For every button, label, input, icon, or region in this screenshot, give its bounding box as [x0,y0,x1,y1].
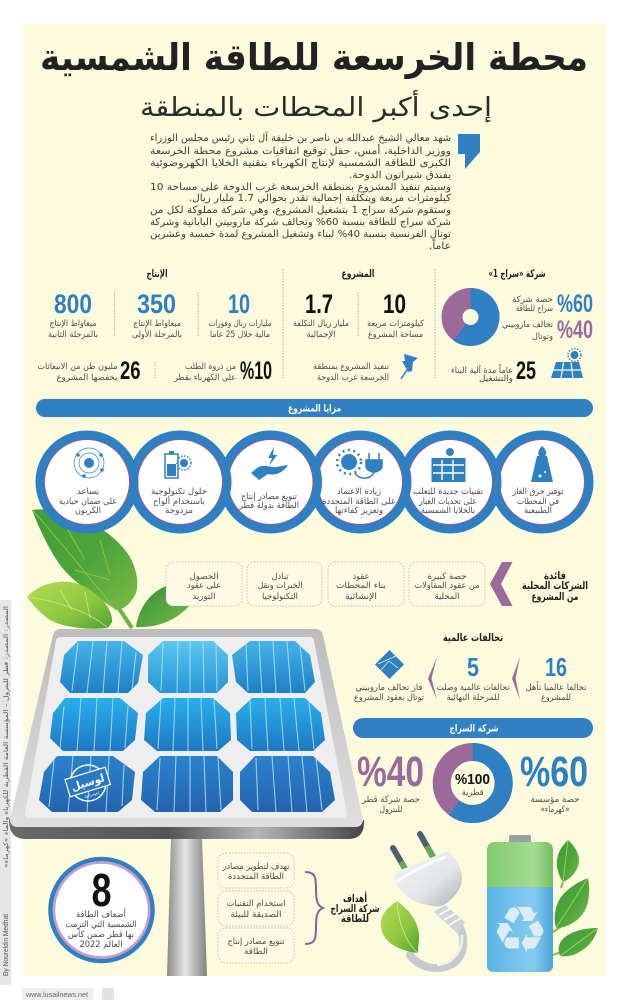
label: يساعد [77,487,100,497]
label: 40% [361,795,420,815]
stamp: Lusail: لوسيل [70,771,106,794]
box: know-how transfer [247,562,322,606]
icon: envelope [375,650,404,679]
icon: quote mark [458,134,480,169]
label: على ضمان حيادية [59,497,117,507]
circle: renewables [313,435,407,529]
box: contracting share: المحلية [434,592,460,602]
label: 25: عاماً مدة آلية البناء [451,363,513,376]
stat: 5: 5 [467,652,479,682]
label: winner: فاز تحالف ماروبيني [356,683,422,693]
pie chart [442,288,500,346]
label: زيادة الاعتماد [337,487,381,497]
label: savings: مليارات ريال وفورات [208,319,272,329]
heading: فائدة [544,570,566,582]
source strip [0,600,11,985]
label: winner [354,683,425,703]
label: توفير حرق الغاز [512,487,564,497]
intro text: وسيتم تنفيذ المشروع بمنطقة الخرسعة غرب الدوحة على مساحة 10 [150,182,451,193]
label: 60% [530,795,580,815]
icon: battery and sun [165,451,191,478]
label: 60%: حصة شركة [512,295,553,305]
label: 5: تحالفات عالمية وصلت [436,683,510,693]
stat: 10: 10 [383,289,406,319]
label: باستخدام ألواح [153,495,205,507]
callout: world cup commitment: بها قطر ضمن كأس [68,928,134,940]
donut chart [442,752,504,814]
icon: push pin [401,354,418,379]
icon: separator chevron [428,657,437,700]
icon: solar panel [551,348,583,378]
icon: solar grid [432,448,466,482]
intro text: بفندق شيراتون الدوحة. [349,170,451,181]
box: construction contracts: الإنشائية [345,592,377,602]
source text: المصدر: المصدر: قطر للبترول – المؤسسة العامة القطرية للكهرباء والماء «كهرماء» [2,606,10,868]
label [238,492,299,511]
box: develop renewables: تهدف لتطوير مصادر [222,862,290,872]
intro text: ووزير الداخلية، أمس، حفل توقيع اتفاقيات مشروع محطة الخرسعة [150,144,451,157]
label: الطاقة بدولة قطر [238,501,299,511]
panel: production [38,268,272,385]
intro text: توتال الفرنسية بنسبة 40% لبناء وتشغيل المشروع لمدة خمسة وعشرين [150,229,451,240]
callout: world cup commitment [50,859,152,961]
label: الطبيعية [524,506,552,516]
label: 40%: وتوتال [532,332,553,342]
label: peak demand: على الكهرباء بقطر [173,373,236,383]
stat: 800: 800 [54,289,92,319]
label: 16: للمشروع [541,693,571,703]
box: eco technologies: استخدام التقنيات [226,899,286,909]
callout: world cup commitment: العالم 2022 [80,940,122,950]
box: supply contracts: الحصول [190,572,218,582]
label: second phase [48,319,98,340]
label: emissions: يخفضها المشروع [56,373,118,383]
label: تنويع مصادر إنتاج [241,492,298,502]
label: 16 [526,681,587,703]
label: location: الخرسعة غرب الدوحة [317,373,389,383]
donut chart: قطرية [462,788,484,798]
icon: separator chevron [512,657,520,700]
label: peak demand [173,362,236,383]
icon: flask [531,446,553,482]
intro text: وستقوم شركة سراج 1 بتشغيل المشروع، وهي شركة مملوكة لكل من [150,205,451,216]
leaves [553,840,598,956]
label: 5 [436,683,510,703]
label: cost [293,319,349,340]
label: cost: مليار ريال التكلفة [293,319,349,329]
label [413,487,484,516]
label: 25 [451,363,513,384]
box: develop renewables: الطاقة المتجددة [228,872,284,882]
label: على تحديات الغبار [418,497,477,507]
label: savings [208,319,272,340]
icon: chevron [490,562,512,606]
label: 25: والتشغيل [479,374,513,384]
cells [39,641,335,812]
heading: أهداف [343,891,367,905]
box: supply contracts: التوريد [192,592,216,602]
subtitle: إحدى أكبر المحطات بالمنطقة [140,89,492,123]
callout: world cup commitment: أضعاف الطاقة [76,908,126,920]
label: مزدوجة [165,506,193,516]
stat: 60%: %60 [557,290,593,318]
intro text [150,131,451,252]
stat: 10%: %10 [240,357,272,385]
heading [330,891,380,925]
banner: Siraj company: شركة السراج [450,724,499,734]
box: contracting share: من عقود المقاولات [414,581,480,591]
box: develop renewables [218,853,294,888]
panel: Siraj goals [218,853,380,963]
heading [522,570,588,603]
intro text: الكبرى للطاقة الشمسية لإنتاج الكهرباء بتقنية الخلايا الكهروضوئية [150,158,451,169]
stat: 350: 350 [137,289,176,319]
label: emissions [38,362,118,383]
label: في المحطات [517,497,559,507]
heading: من المشروع [532,591,578,603]
heading: للطاقة [341,913,369,925]
label: area [367,319,425,340]
label: emissions: مليون طن من الانبعاثات [38,362,118,372]
label: second phase: بالمرحلة الثانية [48,330,98,340]
label: حلول تكنولوجية [151,487,207,497]
box: contracting share: حصة كبيرة [428,572,466,582]
banner: project advantages [36,399,593,417]
label [59,487,117,516]
stat: 40%: %40 [357,748,424,796]
label: peak demand: من ذروة الطلب [185,362,236,372]
label [151,487,207,516]
circle: dual technology [133,435,227,529]
panel: advantages circles [40,435,589,529]
illustration: battery with leaves [487,835,598,972]
label: location: تنفيذ المشروع بمنطقة [313,362,390,372]
box: diversify sources [218,928,294,963]
stamp: Lusail: إنفوجرافيك [83,790,100,800]
label: 60%: حصة مؤسسة [530,795,580,805]
label: 40% [502,320,554,342]
stat: 10: 10 [228,289,250,319]
label: 60%: «كهرماء» [540,805,570,815]
label: وتعزيز كفاءتها [335,506,383,516]
stat: 1.7: 1.7 [305,289,333,319]
stat: 26: 26 [120,357,140,385]
heading: الشركات المحلية [522,580,588,592]
panel: project [293,268,425,383]
dividers [114,269,435,378]
intro text: عاماً. [429,238,451,252]
label: first phase: بالمرحلة الأولى [132,328,182,340]
panel: Siraj ownership [357,748,588,815]
box: diversify sources: تنويع مصادر إنتاج [228,937,285,947]
circle: carbon neutrality [40,435,134,529]
label: الكربون [75,506,101,516]
label: 16: تحالفا عالميا تأهل [526,681,587,693]
label: تقنيات جديدة للتغلب [413,487,484,497]
credit text: By Noureldin Medhat [1,913,10,976]
circle: gas flaring [495,435,589,529]
label: first phase [132,319,182,340]
icon: large green leaves [27,509,190,629]
heading: شركة «سراج 1» [488,268,546,280]
illustration: plug with leaf [381,834,465,968]
box: eco technologies [218,891,294,926]
stamp: Lusail [63,760,113,806]
box: diversify sources: الطاقة [244,947,268,957]
footer: website [22,988,114,1000]
circle: diversify sources [224,435,318,529]
title: محطة الخرسعة للطاقة الشمسية [40,36,588,79]
box: construction contracts [328,562,404,606]
heading: شركة السراج [330,903,380,915]
box: eco technologies: الصديقة للبيئة [230,910,282,920]
icon: recycle: ♻ [491,894,549,968]
label: second phase: ميغاواط الإنتاج [50,319,96,329]
stat: 40%: %40 [557,316,593,344]
box: know-how transfer: تبادل [272,572,289,582]
illustration: solar panel [9,636,364,839]
icon: hand and bolt [251,447,288,480]
label [512,487,564,516]
box: construction contracts: عقود [352,572,370,582]
label: cost: الإجمالية [306,330,336,340]
icon: panel pole [167,838,207,976]
stat: 16: 16 [545,652,567,682]
label: location [313,362,390,383]
box: contracting share [409,562,485,606]
panel: global alliances [354,632,587,703]
box: construction contracts: بناء المحطات [336,581,386,591]
label: 60% [512,295,553,314]
label: 40%: تحالف ماروبيني [502,320,554,330]
icon: sun and plug [337,450,382,478]
box: know-how transfer: الخبرات ونقل [258,581,302,591]
box: supply contracts [166,562,242,606]
label: area: كيلومترات مربعة [367,319,425,329]
box: supply contracts: على عقود [187,581,221,591]
banner: project advantages: مزايا المشروع [288,404,341,414]
label: بالخلايا الشمسية [421,506,475,516]
intro text: شهد معالي الشيخ عبدالله بن ناصر بن خليفة آل ثاني رئيس مجلس الوزراء [150,131,451,144]
label: winner: توتال بعقود المشروع [354,693,425,703]
heading: المشروع [342,268,374,280]
panel: Siraj 1 company [442,268,593,385]
heading: الإنتاج [146,268,168,280]
icon: brace [305,872,323,944]
stat: 25: 25 [516,357,536,385]
box: know-how transfer: التكنولوجيا [262,592,298,602]
heading: تحالفات عالمية [443,632,503,644]
banner: Siraj company [353,718,593,738]
label: 60%: سراج للطاقة [516,304,553,314]
stat: 60%: %60 [520,748,588,796]
label: savings: مالية خلال 25 عاما [210,330,270,340]
label [322,487,396,516]
panel: local companies benefit [166,562,588,606]
label: first phase: ميغاواط الإنتاج [133,319,181,329]
intro text: كيلومترات مربعة وبتكلفة إجمالية تقدر بحوالي 1.7 مليار ريال. [189,193,451,204]
callout: world cup commitment: الشمسية التي التزمت [66,920,136,930]
label: 40%: للبترول [380,805,402,815]
label: area: مساحة المشروع [368,330,423,340]
label: 5: للمرحلة النهائية [446,693,500,703]
label: 40%: حصة شركة قطر [361,795,420,805]
icon: atom [74,448,104,478]
circle: new technologies [403,435,497,529]
footer: website: www.lusailnews.net [25,990,89,999]
label: على الطاقة المتجددة [322,497,396,507]
callout: world cup commitment: 8 [92,864,112,916]
donut label: %100 [455,772,490,788]
intro text: شركة سراج للطاقة بنسبة 60% وتحالف شركة ماروبيني اليابانية وشركة [150,217,451,228]
